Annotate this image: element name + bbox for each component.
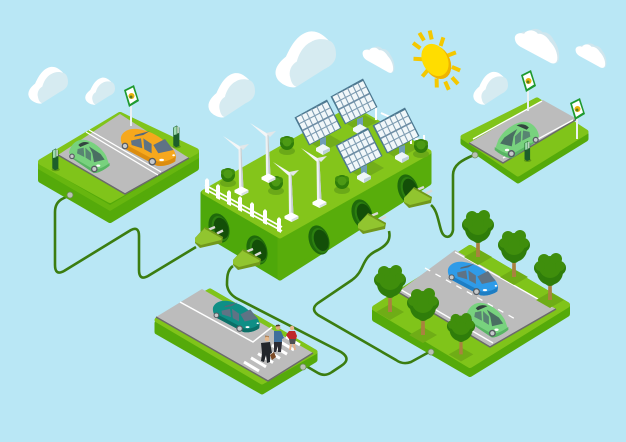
icon: sun (413, 31, 460, 90)
platform top (463, 100, 586, 174)
blue car (448, 262, 498, 296)
cable socket (67, 192, 73, 198)
platform top (41, 115, 196, 200)
road (58, 114, 189, 194)
cloud 6 (473, 72, 508, 105)
cable socket (428, 349, 434, 355)
back fence (376, 108, 428, 144)
tree 4 (462, 210, 494, 265)
lane marking (180, 302, 272, 342)
cloud 8 (576, 43, 606, 68)
cable: tree platform to central block (314, 231, 431, 363)
clouds (28, 29, 606, 117)
crosswalk (244, 337, 300, 371)
tree 6 (534, 253, 566, 308)
socket 2 (243, 233, 271, 267)
person: businessman (261, 336, 276, 363)
panel: upper right charging platform (463, 70, 586, 181)
cloud 2 (85, 78, 115, 105)
wind turbines (223, 123, 327, 222)
plug 3 (358, 213, 386, 234)
plug 1 (195, 227, 223, 248)
socket 1 (205, 211, 233, 245)
person: woman in red (286, 326, 297, 350)
cloud 3 (208, 73, 255, 117)
road markings (398, 252, 552, 343)
road (469, 100, 577, 163)
road (398, 250, 556, 347)
panel shadows (312, 115, 418, 179)
solar panel 1 (294, 100, 342, 155)
tree 2 (407, 288, 439, 343)
block right face (280, 153, 429, 278)
cloud 1 (28, 67, 68, 104)
platform base (41, 115, 196, 220)
teal car (213, 301, 260, 332)
solar panel 4 (372, 108, 420, 163)
tree 5 (498, 230, 530, 285)
panel: tree-lined road platform (374, 210, 567, 374)
sign (124, 85, 139, 126)
icon: charging station right (173, 126, 181, 148)
socket 4 (348, 197, 376, 231)
cable: left platform to central block (55, 195, 196, 278)
cloud 5 (363, 46, 394, 73)
block top (204, 108, 429, 236)
sign 2 (570, 98, 585, 139)
road markings (86, 130, 161, 175)
socket 5 (394, 172, 422, 206)
block left face (203, 193, 280, 278)
platform base (463, 100, 586, 181)
icon: charging station left (52, 149, 60, 171)
charging station (524, 141, 531, 162)
tree 3 (447, 313, 475, 361)
bushes (220, 136, 429, 195)
tree 1 (374, 265, 406, 320)
solar panel 2 (330, 78, 378, 135)
platform top (375, 248, 567, 365)
socket 3 (305, 223, 333, 257)
plug 4 (404, 187, 432, 208)
panel: crosswalk road platform (156, 289, 315, 392)
platform base (375, 248, 567, 374)
orange car (121, 129, 176, 166)
green car (466, 303, 508, 337)
green car (495, 122, 539, 158)
platform top (157, 291, 315, 382)
cable socket (472, 152, 478, 158)
road (156, 289, 313, 381)
person: man in blue (274, 324, 284, 352)
white fence (205, 178, 282, 233)
cloud 4 (276, 31, 336, 87)
cable: road platform to central block (227, 266, 346, 375)
panel: left charging platform (38, 85, 199, 220)
cloud 7 (515, 29, 559, 63)
panel: central energy block (195, 78, 432, 278)
solar panel 3 (336, 128, 382, 183)
road markings (473, 101, 573, 158)
sign 1 (521, 70, 536, 111)
cable socket (300, 364, 306, 370)
green car (69, 140, 110, 173)
cable: upper right platform to central block (431, 155, 474, 237)
plug 2 (233, 249, 261, 270)
platform base (157, 291, 315, 392)
